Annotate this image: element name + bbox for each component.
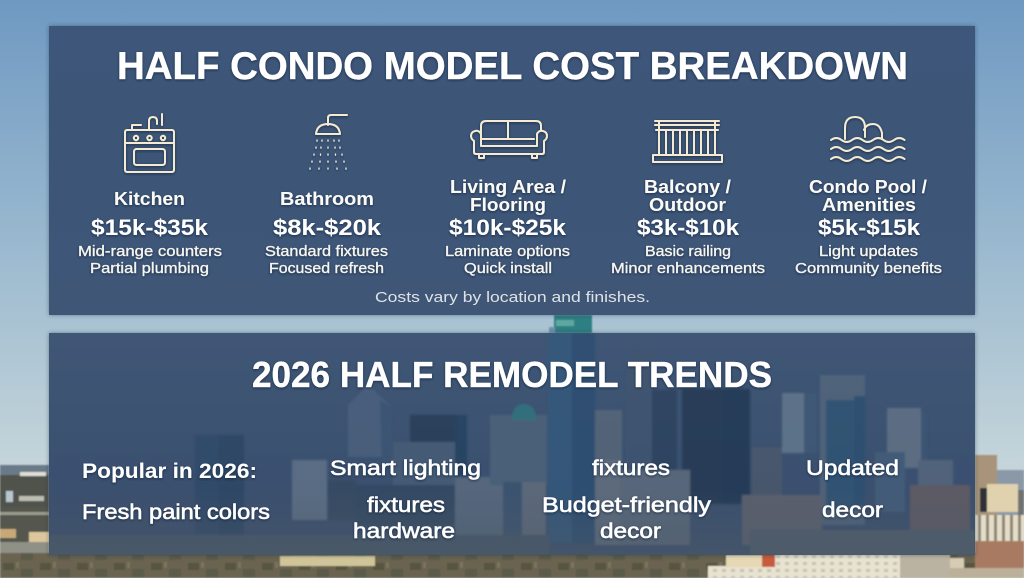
trend column: smart lighting <box>330 457 481 543</box>
text block: bathroom: Standard fixtures <box>265 243 388 260</box>
skyline seen through panel <box>49 333 975 555</box>
text block: condo pool: Amenities <box>822 195 916 215</box>
text block: condo pool: Condo Pool / <box>809 177 927 197</box>
text block: balcony: Basic railing <box>645 243 731 260</box>
trend column: smart lighting: fixtures <box>367 494 445 517</box>
trend column: popular in 2026: Fresh paint colors <box>82 501 270 524</box>
trend column: smart lighting: hardware <box>353 520 455 543</box>
icon: kitchen stove <box>125 114 174 172</box>
text block: kitchen <box>78 189 222 277</box>
text block: balcony: Minor enhancements <box>611 260 765 277</box>
text block: living area <box>445 177 570 277</box>
text block: balcony: $3k-$10k <box>637 215 740 240</box>
icon: sofa <box>471 121 547 158</box>
trend column: popular in 2026: Popular in 2026: <box>82 460 257 483</box>
footnote: Costs vary by location and finishes. <box>375 289 650 306</box>
trend column: smart lighting: Smart lighting <box>330 457 481 480</box>
trend column: fixtures: decor <box>600 520 661 543</box>
text block: condo pool <box>795 177 942 277</box>
text block: condo pool: $5k-$15k <box>818 215 921 240</box>
text block: bathroom: Bathroom <box>280 189 374 209</box>
text block: living area: $10k-$25k <box>449 215 567 240</box>
tower top above trends panel <box>549 315 592 333</box>
title: cost breakdown: HALF CONDO MODEL COST BREAKDOWN <box>117 45 908 88</box>
text block: living area: Laminate options <box>445 243 570 260</box>
trend column: fixtures <box>542 457 712 543</box>
text block: bathroom: $8k-$20k <box>273 215 382 240</box>
text block: living area: Living Area / <box>450 177 566 197</box>
icon: pool waves <box>831 117 904 161</box>
panel: remodel trends <box>49 333 975 555</box>
text block: condo pool: Light updates <box>819 243 918 260</box>
trend column: updated <box>806 457 899 522</box>
trend column: popular in 2026 <box>82 460 270 524</box>
text block: kitchen: Mid-range counters <box>78 243 222 260</box>
trend column: updated: decor <box>822 499 883 522</box>
title: remodel trends: 2026 HALF REMODEL TRENDS <box>252 354 772 395</box>
text block: kitchen: $15k-$35k <box>91 215 209 240</box>
text block: balcony <box>611 177 765 277</box>
text block: bathroom: Focused refresh <box>269 260 384 277</box>
icon: shower <box>310 115 347 169</box>
trend column: fixtures: Budget-friendly <box>542 494 712 517</box>
text block: living area: Quick install <box>464 260 552 277</box>
trend column: updated: Updated <box>806 457 899 480</box>
text block: kitchen: Kitchen <box>114 189 185 209</box>
text block: balcony: Outdoor <box>649 195 726 215</box>
text block: living area: Flooring <box>470 195 546 215</box>
icon: balcony railing <box>653 121 722 162</box>
trend column: fixtures: fixtures <box>592 457 670 480</box>
text block: condo pool: Community benefits <box>795 260 942 277</box>
text block: bathroom <box>265 189 388 277</box>
text block: kitchen: Partial plumbing <box>90 260 209 277</box>
text block: balcony: Balcony / <box>644 177 731 197</box>
